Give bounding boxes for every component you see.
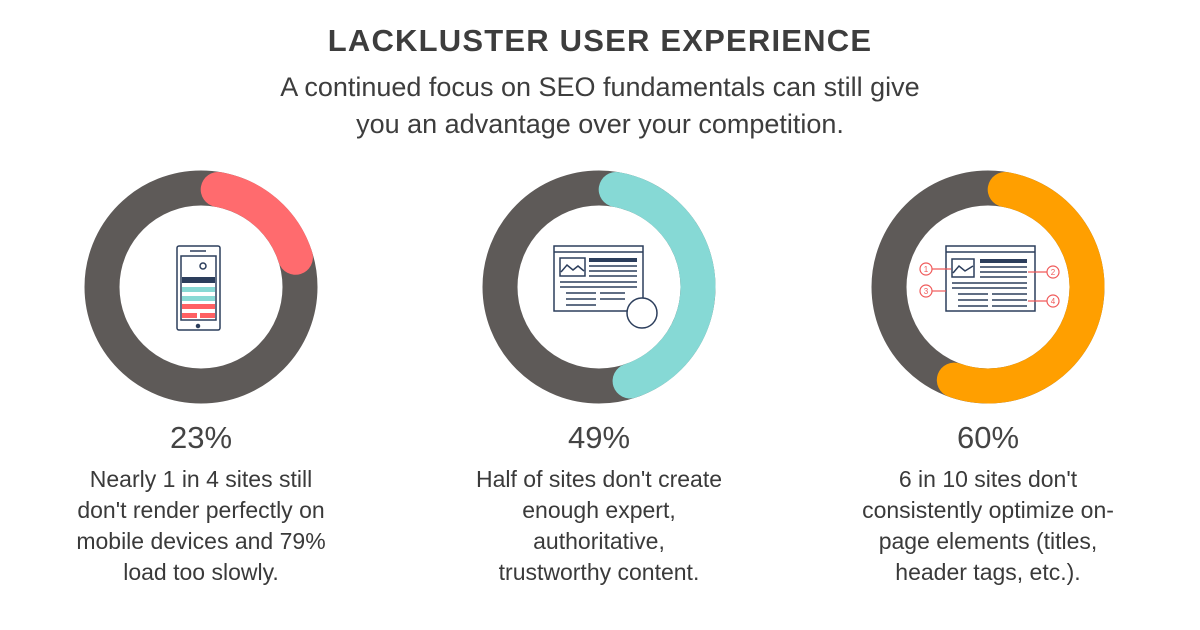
donut: 60%: 1 bbox=[924, 265, 929, 274]
text: stat 2 description: Half of sites don't create bbox=[476, 466, 722, 492]
text: stat 2 description: authoritative, bbox=[533, 528, 665, 554]
donut: 60% bbox=[873, 172, 1103, 402]
donut: 49% bbox=[484, 172, 714, 402]
icon: webpage with magnifier bbox=[554, 246, 657, 328]
text: stat 1 description: mobile devices and 79% bbox=[76, 528, 326, 554]
stat 1: 23% bbox=[170, 420, 232, 455]
icon: phone bbox=[177, 246, 220, 330]
donut: 60%: 3 bbox=[924, 287, 929, 296]
text: stat 2 description: enough expert, bbox=[522, 497, 676, 523]
text: stat 1 description: load too slowly. bbox=[123, 559, 279, 585]
text: stat 3 description: page elements (titles, bbox=[879, 528, 1097, 554]
text: stat 3 description: 6 in 10 sites don't bbox=[899, 466, 1077, 492]
text: stat 3 description bbox=[862, 466, 1114, 585]
subtitle bbox=[280, 72, 920, 139]
donut: 60%: 2 bbox=[1051, 268, 1056, 277]
subtitle: A continued focus on SEO fundamentals can still give bbox=[280, 72, 920, 102]
text: stat 1 description bbox=[76, 466, 326, 585]
text: stat 3 description: header tags, etc.). bbox=[895, 559, 1081, 585]
donut: 60%: 4 bbox=[1051, 297, 1056, 306]
donut: 23% bbox=[86, 172, 316, 402]
text: stat 2 description bbox=[476, 466, 722, 585]
text: stat 2 description: trustworthy content. bbox=[499, 559, 699, 585]
subtitle: you an advantage over your competition. bbox=[356, 109, 844, 139]
text: stat 1 description: don't render perfectly on bbox=[77, 497, 325, 523]
icon: webpage with numbered elements bbox=[946, 246, 1035, 311]
text: stat 1 description: Nearly 1 in 4 sites still bbox=[90, 466, 312, 492]
text: stat 3 description: consistently optimize on- bbox=[862, 497, 1114, 523]
stat 3: 60% bbox=[957, 420, 1019, 455]
stat 2: 49% bbox=[568, 420, 630, 455]
title: LACKLUSTER USER EXPERIENCE bbox=[328, 23, 872, 58]
